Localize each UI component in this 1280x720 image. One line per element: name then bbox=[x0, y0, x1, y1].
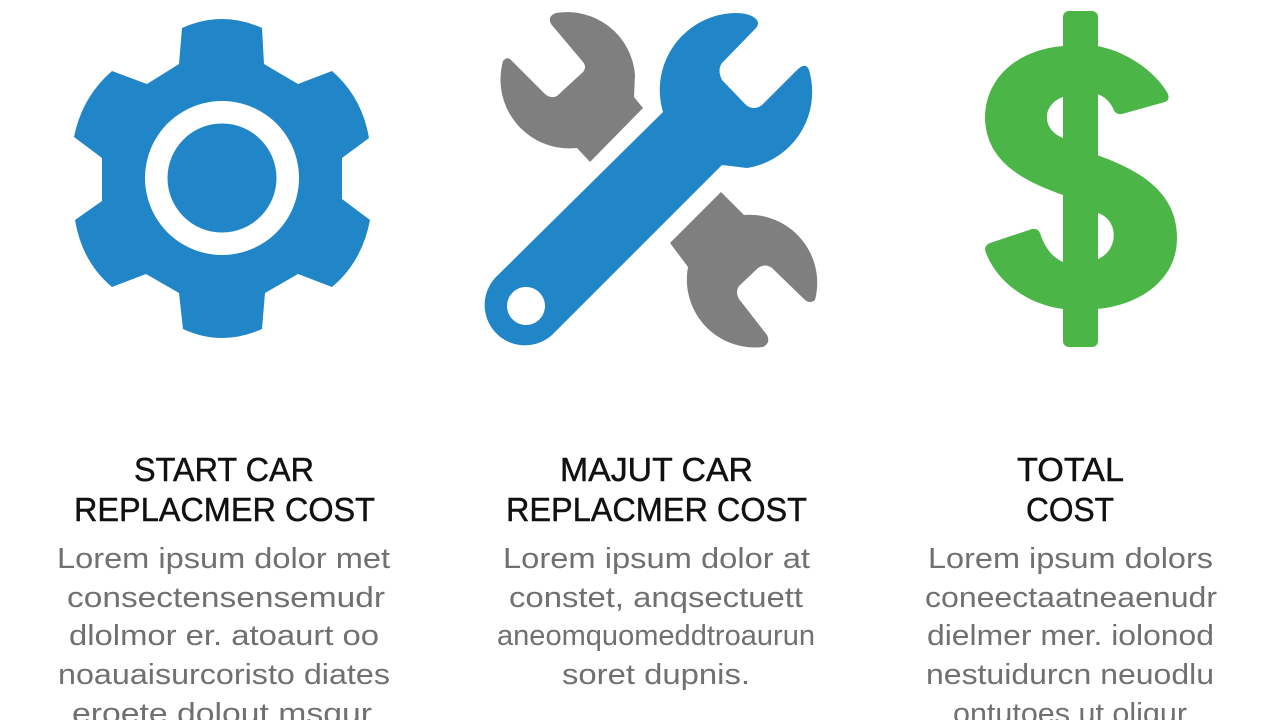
heading: start car replacer cost bbox=[74, 451, 375, 528]
text block: major car description: constet, anqsectuett bbox=[509, 582, 803, 614]
text block: start car description: dlolmor er. atoaurt oo bbox=[69, 620, 379, 652]
heading: total cost: TOTAL bbox=[1017, 451, 1124, 488]
panel: maintenance car replacement cost bbox=[485, 12, 817, 691]
icon: grey wrench head bottom bbox=[670, 192, 817, 347]
text block: start car description: noauaisurcoristo diates bbox=[58, 659, 390, 691]
text block: start car description bbox=[57, 543, 390, 720]
heading: major car replacer cost bbox=[506, 451, 807, 528]
heading: start car replacer cost: REPLACMER COST bbox=[74, 491, 375, 528]
icon: blue gear bbox=[74, 19, 370, 338]
icon: crossed wrenches bbox=[485, 12, 817, 347]
heading: total cost bbox=[1017, 451, 1124, 528]
text block: start car description: Lorem ipsum dolor met bbox=[57, 543, 390, 575]
icon: green dollar sign bbox=[985, 11, 1177, 347]
text block: major car description: soret dupnis. bbox=[562, 659, 750, 691]
text block: major car description: Lorem ipsum dolor at bbox=[503, 543, 810, 575]
text block: total cost description: dielmer mer. iolonod bbox=[927, 620, 1214, 652]
text block: major car description: aneomquomeddtroaurun bbox=[497, 620, 815, 652]
icon: blue wrench bbox=[485, 13, 812, 345]
text block: total cost description bbox=[925, 543, 1217, 720]
text block: major car description bbox=[497, 543, 815, 691]
heading: major car replacer cost: MAJUT CAR bbox=[560, 451, 753, 488]
text block: total cost description: Lorem ipsum dolors bbox=[928, 543, 1213, 575]
text block: start car description: consectensensemudr bbox=[67, 582, 385, 614]
panel: start car replacement cost bbox=[57, 19, 390, 720]
heading: start car replacer cost: START CAR bbox=[134, 451, 314, 488]
heading: total cost: COST bbox=[1026, 491, 1114, 528]
text block: total cost description: coneectaatneaenudr bbox=[925, 582, 1217, 614]
text block: total cost description: nestuidurcn neuodlu bbox=[926, 659, 1214, 691]
icon: grey wrench head top bbox=[500, 12, 643, 162]
heading: major car replacer cost: REPLACMER COST bbox=[506, 491, 807, 528]
panel: total cost bbox=[925, 11, 1217, 720]
